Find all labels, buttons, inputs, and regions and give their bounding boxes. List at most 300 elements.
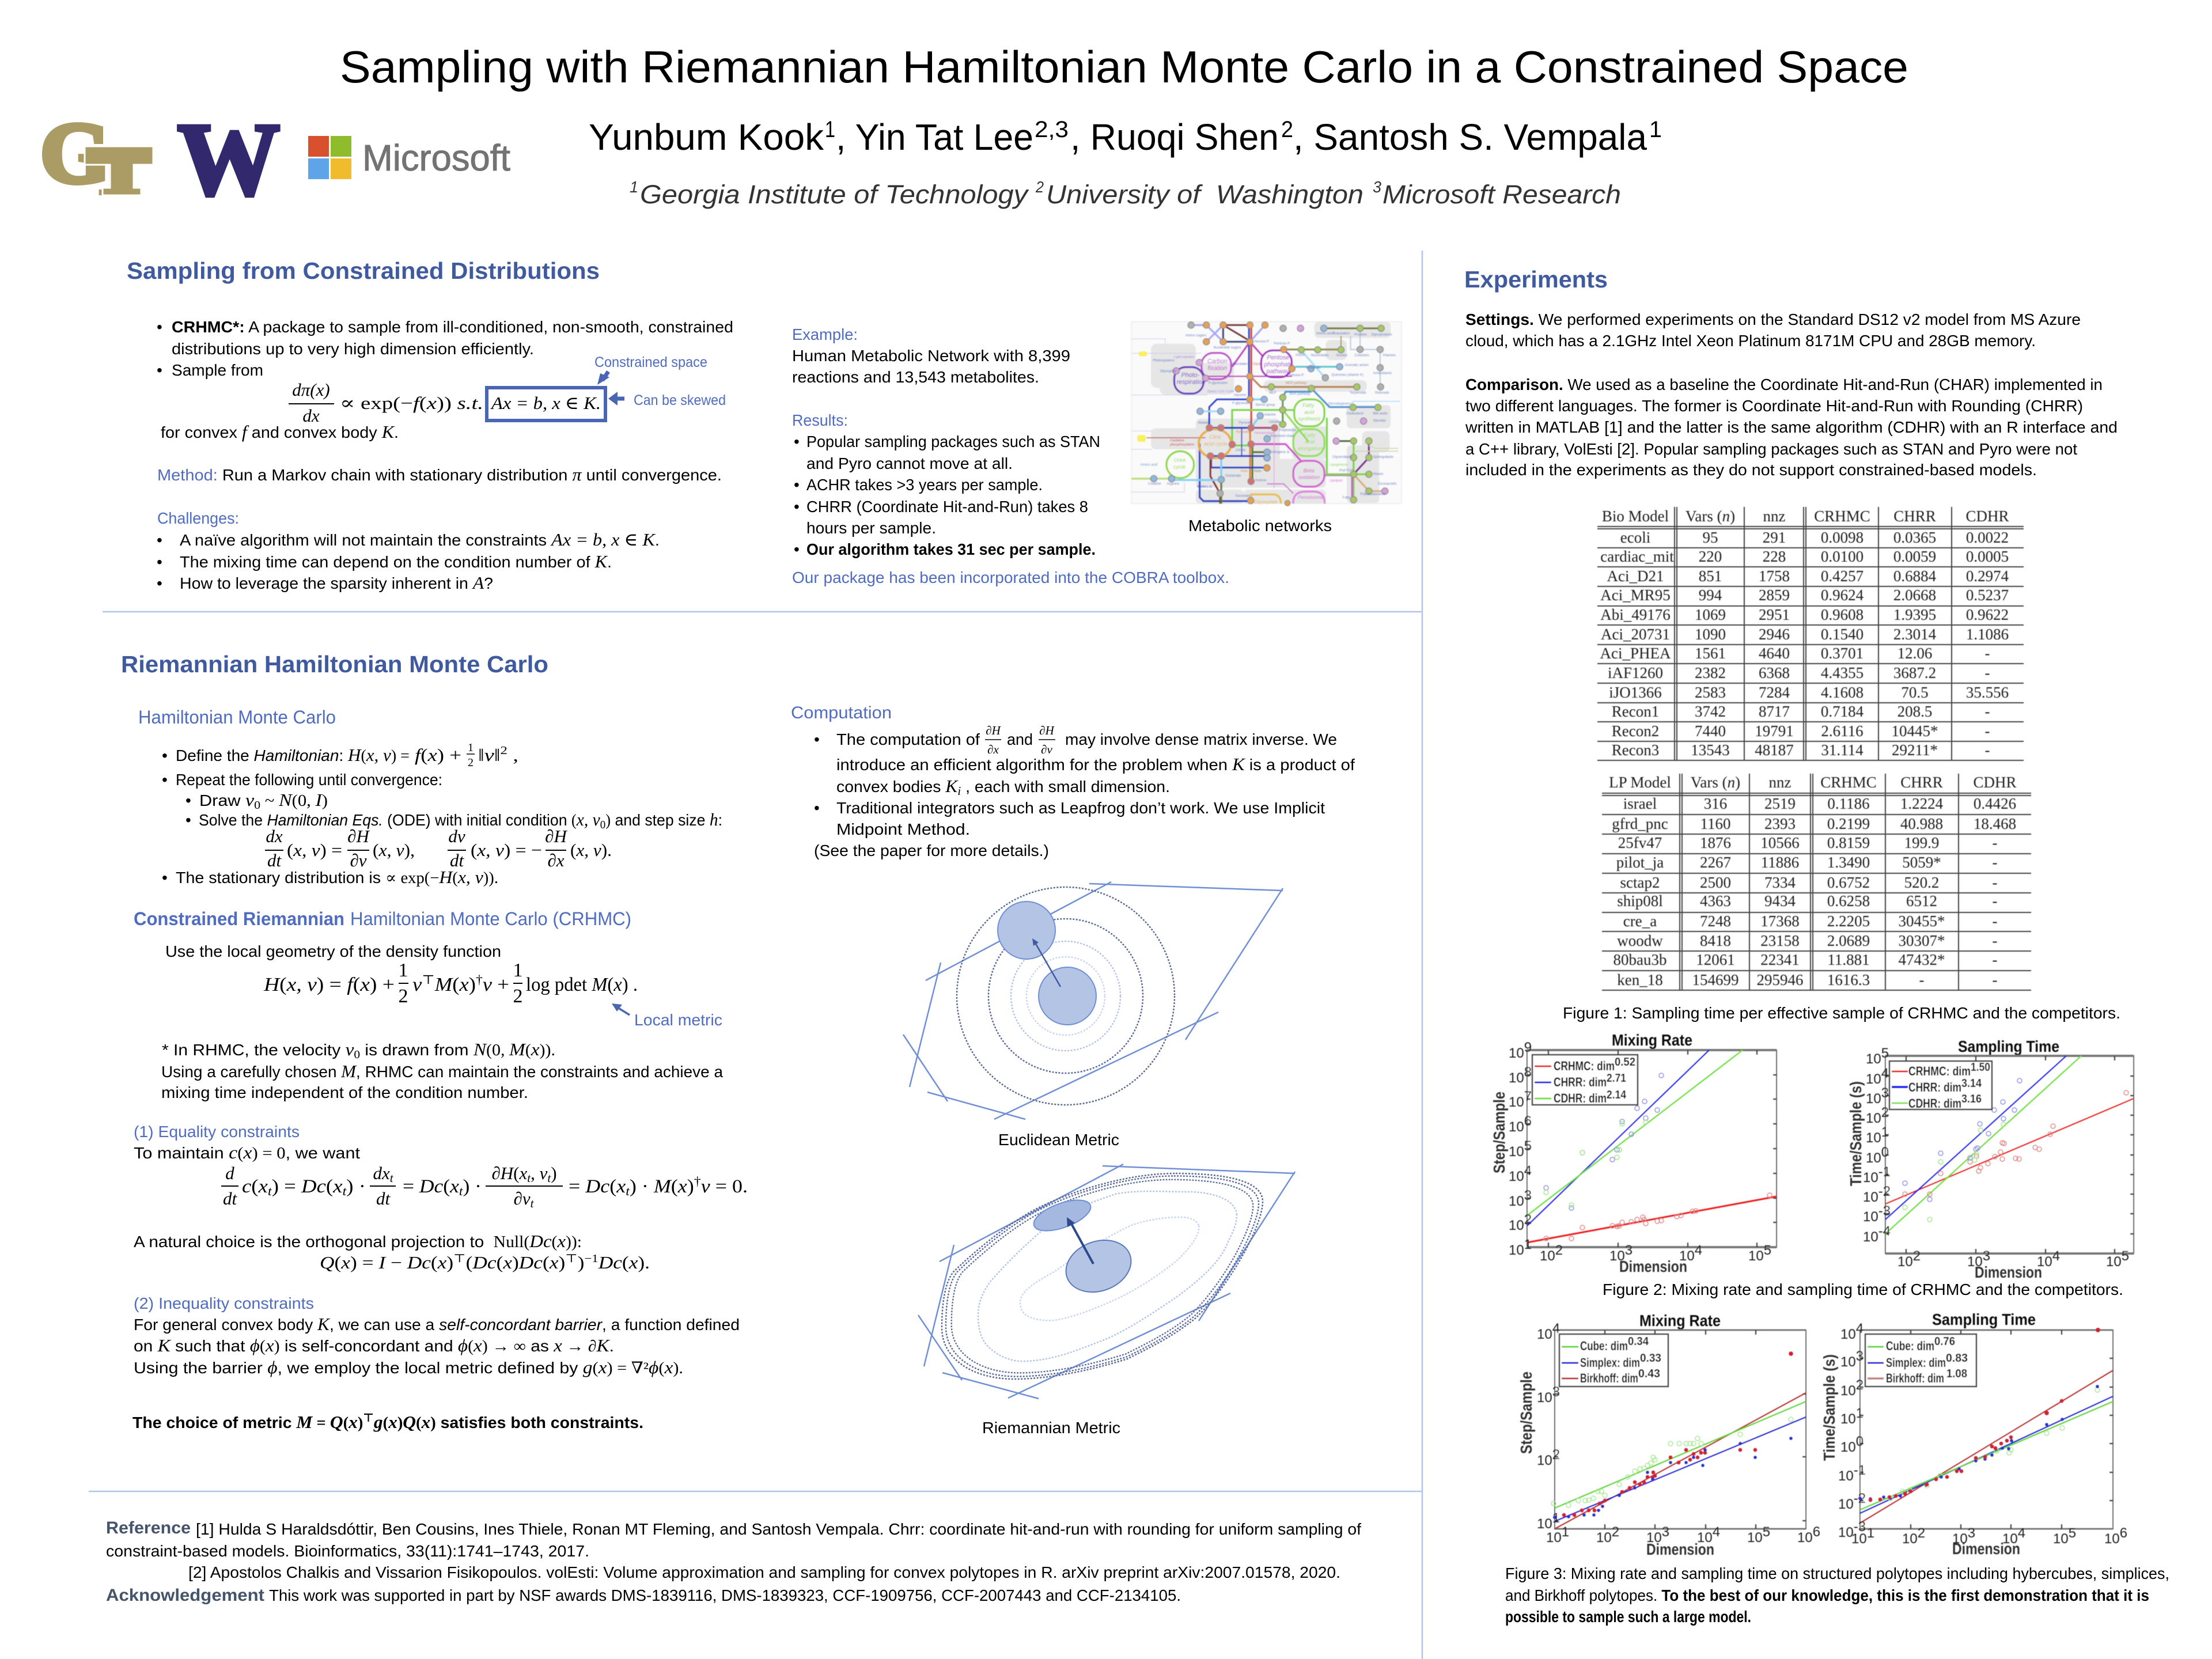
formula: riemannian hamiltonian: 2 — [399, 986, 408, 1007]
chart: figure 3 mixing rate: 0.34 — [1628, 1335, 1649, 1348]
chart: figure 2 sampling time: -4 — [1878, 1224, 1891, 1239]
table: LP models: 295946 — [1757, 971, 1803, 988]
diagram: metabolic network: Cholesterol — [1346, 412, 1363, 415]
table: bio models: 10445* — [1892, 722, 1938, 740]
formula: equality constraint derivation: ) = — [272, 1176, 301, 1197]
diagram: metabolic network: Sphingolipids — [1373, 456, 1393, 459]
chart: figure 2 mixing rate: 2 — [1524, 1212, 1532, 1228]
text block: hamiltonian definition: ‖v‖ — [478, 745, 499, 765]
diagram: metabolic network: Pyruvate — [1239, 421, 1253, 425]
formula: equality constraint derivation: ∂H(x — [491, 1163, 527, 1183]
chart: figure 3 mixing rate: 6 — [1813, 1524, 1820, 1540]
formula: target density: dπ(x) — [292, 380, 330, 400]
diagram: metabolic network: Creatine — [1148, 483, 1161, 486]
chart: figure 2 sampling time: 10 — [1897, 1254, 1913, 1270]
chart: figure 2 sampling time — [1847, 1037, 2134, 1281]
table: bio models: 291 — [1763, 529, 1786, 546]
text block: example: reactions and 13,543 metabolites. — [792, 368, 1039, 386]
chart: figure 3 sampling time: 10 — [1840, 1411, 1856, 1427]
table: bio models: 220 — [1699, 548, 1722, 565]
chart: figure 2 sampling time: -3 — [1878, 1203, 1891, 1219]
text block: RHMC note: is drawn from — [360, 1041, 474, 1059]
diagram: metabolic network: acid cycle — [1204, 441, 1228, 446]
formula: equality constraint derivation: Dc(x — [301, 1176, 342, 1197]
chart: figure 2 sampling time: 10 — [1866, 1051, 1881, 1067]
diagram: metabolic network: Polyketides — [1279, 429, 1297, 433]
chart: figure 3 mixing rate: 3 — [1662, 1524, 1669, 1540]
diagram: metabolic network: Nucleotide sugars — [1214, 346, 1241, 350]
logo: Microsoft: Microsoft — [362, 137, 510, 179]
text and formula: orthogonal projection: ( — [466, 1252, 472, 1272]
table: bio models: 2583 — [1695, 684, 1726, 701]
chart: figure 2 sampling time: 10 — [1863, 1209, 1878, 1225]
text block: results — [792, 411, 1229, 586]
diagram: metabolic network: Nucleotides — [1311, 354, 1329, 358]
table: bio models: 6368 — [1759, 664, 1790, 681]
diagram: metabolic network: acid — [1304, 409, 1315, 415]
table: bio models: 2859 — [1759, 586, 1790, 604]
chart: figure 3 sampling time: 10 — [1840, 1383, 1856, 1399]
authors: 1 — [825, 117, 835, 142]
chart: figure 2 sampling time: 10 — [1866, 1130, 1881, 1146]
diagram: metabolic network: Lipolysis — [1330, 479, 1343, 483]
chart: figure 3 sampling time: 10 — [2053, 1531, 2069, 1547]
table: LP models: 23158 — [1760, 932, 1800, 949]
authors: , Yin Tat Lee — [836, 116, 1033, 158]
chart: figure 3 sampling time: 1 — [1867, 1525, 1874, 1541]
table: LP models: 2267 — [1700, 854, 1731, 871]
diagram: metabolic network: Eicosanoids — [1378, 483, 1396, 486]
text block: results: Our algorithm takes 31 sec per sample. — [806, 540, 1096, 558]
formula: equality constraint derivation: c(x — [242, 1176, 267, 1197]
text block: computation notes: • — [814, 799, 820, 817]
chart: figure 2 mixing rate: 2.71 — [1607, 1072, 1626, 1085]
chart: figure 3 sampling time: 10 — [2104, 1531, 2120, 1547]
text block: computation notes: , each with small dimension. — [961, 778, 1170, 796]
chart: figure 3 mixing rate: 2 — [1552, 1447, 1560, 1463]
formula: hamilton's equations: dv — [448, 826, 465, 846]
text block: challenges: • — [157, 553, 162, 571]
chart: figure 2 sampling time: 10 — [1866, 1150, 1881, 1166]
text block: references: Reference — [106, 1518, 191, 1537]
chart: figure 3 mixing rate: 10 — [1546, 1530, 1562, 1546]
chart: figure 2 mixing rate: Dimension — [1619, 1257, 1687, 1275]
chart: figure 2 sampling time: 2 — [1913, 1248, 1921, 1264]
table: bio models: 1.9395 — [1893, 606, 1936, 623]
text block: inequality constraints: Using the barrier ϕ, we employ the local metric defined by g(x) = ∇²ϕ(x). — [134, 1357, 683, 1377]
text and formula: orthogonal projection: ⊤ — [565, 1252, 578, 1265]
text block: challenges: • — [157, 574, 162, 592]
diagram: metabolic network: Steroidogenesis — [1328, 403, 1353, 406]
table: bio models: 1069 — [1695, 606, 1726, 623]
diagram: metabolic network: Fermentation — [1254, 431, 1275, 435]
chart: figure 2 sampling time: 10 — [1866, 1111, 1881, 1126]
text block: hamiltonian definition: • — [185, 811, 191, 829]
text and formula: orthogonal projection: ) — [578, 1252, 584, 1272]
table: LP models: 10566 — [1760, 834, 1800, 851]
chart: figure 2 mixing rate: 7 — [1524, 1089, 1532, 1104]
table: LP models: 0.6258 — [1827, 892, 1870, 910]
table: LP models: 0.4426 — [1974, 795, 2016, 812]
chart: figure 3 mixing rate: 3 — [1552, 1384, 1560, 1400]
table: bio models: 48187 — [1755, 741, 1794, 759]
chart: figure 2 sampling time: CDHR: dim — [1908, 1096, 1961, 1111]
diagram: metabolic network: Fatty — [1304, 432, 1316, 438]
diagram: metabolic network: Lactate — [1269, 421, 1281, 424]
caption: riemannian metric: Riemannian Metric — [982, 1419, 1120, 1437]
table: bio models: - — [1985, 722, 1990, 740]
text block: computation notes: and — [1007, 730, 1033, 748]
formula: equality constraint derivation: = Dc(x — [569, 1176, 625, 1197]
subheading: CRHMC — [134, 908, 631, 929]
diagram: metabolic network: feeders to — [1197, 486, 1213, 489]
text block: CRHMC description: CRHMC*: A package to sample from ill-conditioned, non-smooth, constrained — [172, 318, 733, 336]
diagram: metabolic network: Beta — [1304, 468, 1315, 474]
formula: hamilton's equations — [265, 826, 612, 870]
text block: settings: Settings. We performed experiments on the Standard DS12 v2 model from MS Azure — [1465, 310, 2081, 328]
subheading: computation: Computation — [791, 703, 892, 722]
panel: sampling from constrained distributions — [127, 257, 1402, 593]
chart: figure 2 sampling time: 10 — [1863, 1229, 1878, 1245]
diagram: metabolic network: MVA pathway — [1289, 392, 1311, 396]
text block: hamiltonian definition: f(x) + — [415, 745, 461, 765]
chart: figure 3 mixing rate: Birkhoff: dim — [1580, 1371, 1638, 1385]
chart: figure 2 sampling time: Time/Sample (s) — [1847, 1081, 1865, 1186]
text block: hamiltonian definition: 2 — [501, 744, 507, 757]
text block: inequality constraints: on K such that ϕ(x) is self-concordant and ϕ(x) → ∞ as x → ∂K. — [134, 1335, 614, 1355]
chart: figure 2 mixing rate: 10 — [1509, 1194, 1524, 1209]
text block: references: constraint-based models. Bioinformatics, 33(11):1741–1743, 2017. — [106, 1542, 589, 1560]
callout: constrained space: Constrained space — [594, 354, 707, 370]
chart: figure 3 sampling time: 10 — [2002, 1531, 2018, 1547]
table: LP models: 25fv47 — [1618, 834, 1662, 851]
table: LP models: 11886 — [1761, 854, 1799, 871]
chart: figure 2 sampling time: CRHMC: dim — [1908, 1064, 1971, 1078]
formula: target density — [289, 380, 605, 426]
text: convex note: for convex f and convex body K. — [161, 422, 399, 442]
chart: figure 3 sampling time: 10 — [1840, 1354, 1856, 1370]
formula: equality constraint derivation: t — [268, 1184, 272, 1198]
chart: figure 3 mixing rate: 4 — [1552, 1321, 1560, 1336]
table: LP models: CRHMC — [1820, 774, 1877, 791]
logo: Georgia Tech — [40, 105, 153, 209]
table: bio models: 0.0005 — [1966, 548, 2009, 565]
diagram: metabolic network: Serine group — [1255, 403, 1275, 407]
title: Sampling with Riemannian Hamiltonian Monte Carlo in a Constrained Space — [340, 41, 1908, 92]
table: bio models: Bio Model — [1602, 507, 1669, 525]
diagram: metabolic network: Ketone — [1255, 479, 1267, 482]
chart: figure 2 sampling time: 2 — [1881, 1105, 1889, 1120]
formula: hamilton's equations: ∂x — [547, 850, 565, 870]
formula: equality constraint derivation: ) — [551, 1163, 557, 1183]
text block: hamiltonian definition: ~ — [260, 792, 279, 810]
chart: figure 2 sampling time: Dimension — [1975, 1263, 2042, 1281]
panel: experiments — [1464, 266, 2169, 1626]
chart: figure 2 sampling time: 3 — [1881, 1085, 1889, 1101]
table: bio models: - — [1985, 703, 1990, 720]
diagram: metabolic network: Malate — [1198, 421, 1209, 425]
text block: results: • — [794, 498, 800, 516]
chart: figure 2 mixing rate: 9 — [1524, 1040, 1532, 1055]
text block: CRHMC description: distributions up to very high dimension efficiently. — [172, 340, 534, 358]
chart: figure 3 sampling time: 3 — [1968, 1525, 1975, 1541]
diagram: metabolic network: Glutamate — [1225, 474, 1241, 478]
text and formula: orthogonal projection: Dc — [598, 1252, 622, 1272]
table: bio models: Recon2 — [1612, 722, 1659, 740]
formula: equality constraint derivation: M(x) — [654, 1176, 694, 1197]
chart: figure 3 sampling time — [1820, 1310, 2127, 1558]
table: LP models: - — [1992, 971, 1998, 988]
chart: figure 3 sampling time: Sampling Time — [1932, 1310, 2036, 1328]
table: LP models: 2519 — [1764, 795, 1796, 812]
diagram: metabolic network: Carbon — [1207, 358, 1228, 365]
text block: references — [106, 1518, 1361, 1581]
diagram: riemannian metric — [918, 1164, 1295, 1399]
table: LP models: 9434 — [1764, 892, 1796, 910]
formula: equality constraint derivation: v — [540, 1163, 548, 1183]
text block: equality constraints — [134, 1123, 360, 1162]
chart: figure 2 mixing rate: CDHR: dim — [1554, 1091, 1607, 1105]
diagram: metabolic network: Glyco- — [1253, 362, 1263, 366]
text block: CRHMC description: Sample from — [172, 361, 263, 379]
chart: figure 2 mixing rate: 10 — [1609, 1248, 1625, 1264]
affiliations: University of Washington — [1046, 180, 1363, 209]
diagram: metabolic network: Pentose-P — [1274, 342, 1290, 346]
diagram: metabolic network: Urea — [1174, 457, 1185, 463]
formula: equality constraint derivation: † — [694, 1174, 701, 1188]
text block: computation notes: The computation of — [836, 730, 980, 748]
text block: computation notes: ∂H — [986, 724, 1002, 737]
table: bio models: 4.1608 — [1821, 684, 1863, 701]
table: LP models: ship08l — [1617, 892, 1663, 910]
chart: figure 3 sampling time: Time/Sample (s) — [1820, 1354, 1838, 1461]
table: bio models: 2382 — [1695, 664, 1726, 681]
table: LP models: ken_18 — [1617, 971, 1663, 988]
table: bio models: 2.0668 — [1893, 586, 1936, 604]
diagram: metabolic network: Glycerol — [1234, 394, 1246, 397]
chart: figure 2 mixing rate: 10 — [1509, 1070, 1524, 1086]
caption: figure 3 — [1505, 1565, 2169, 1626]
text block: equality constraints: To maintain c(x) = 0, we want — [134, 1142, 360, 1162]
diagram: metabolic network: MEP — [1269, 392, 1277, 395]
formula: hamilton's equations: (x, v) = − — [471, 840, 542, 860]
table: bio models: 29211* — [1892, 741, 1938, 759]
table: bio models: 2.3014 — [1893, 626, 1937, 643]
chart: figure 2 mixing rate: 10 — [1509, 1046, 1524, 1061]
chart: figure 3 sampling time: 10 — [1840, 1327, 1856, 1342]
diagram: metabolic network: Aromatic amino — [1345, 364, 1369, 368]
chart: figure 3 sampling time: 0.76 — [1934, 1335, 1955, 1348]
panel: riemannian hamiltonian monte carlo — [121, 651, 748, 1432]
diagram: metabolic network: Fatty — [1302, 403, 1315, 408]
diagram: metabolic network: Retinoids — [1375, 392, 1389, 395]
diagram: metabolic network: P-glycerates — [1209, 382, 1228, 385]
text block: hamiltonian definition: Define the Hamiltonian: H(x, v) = — [176, 745, 410, 765]
text block: challenges: How to leverage the sparsity inherent in A? — [180, 573, 493, 593]
text and formula: orthogonal projection: (x). — [622, 1252, 648, 1272]
chart: figure 2 sampling time: 1 — [1881, 1124, 1889, 1140]
diagram: metabolic network: Amino acids — [1316, 332, 1335, 336]
table: bio models: 0.1540 — [1821, 626, 1863, 643]
table: bio models: 1090 — [1695, 626, 1726, 643]
chart: figure 2 mixing rate: 4 — [1695, 1243, 1702, 1258]
text block: computation notes: ∂H — [1039, 724, 1055, 737]
diagram: metabolic network: Ketogenic & — [1271, 451, 1289, 454]
table: bio models: iAF1260 — [1608, 664, 1663, 681]
affiliations: Georgia Institute of Technology — [640, 180, 1029, 209]
diagram: metabolic network: fixation — [1208, 365, 1227, 372]
chart: figure 3 sampling time: 0 — [1856, 1434, 1863, 1449]
diagram: metabolic network: Lipogenesis — [1330, 464, 1348, 467]
text block: computation notes: ∂v — [1041, 743, 1053, 756]
table: bio models: 0.0365 — [1893, 529, 1936, 546]
caption: euclidean metric: Euclidean Metric — [998, 1131, 1119, 1149]
diagram: metabolic network: Cofactors — [1354, 354, 1369, 358]
table: bio models: - — [1985, 664, 1990, 681]
chart: figure 2 sampling time: Sampling Time — [1958, 1037, 2059, 1055]
caption: figure 2: Figure 2: Mixing rate and sampling time of CRHMC and the competitors. — [1603, 1281, 2123, 1298]
chart: figure 2 sampling time: -1 — [1878, 1164, 1891, 1180]
text block: results: ACHR takes >3 years per sample. — [806, 476, 1043, 494]
table: bio models: CDHR — [1965, 507, 2009, 525]
formula: equality constraint derivation — [221, 1163, 748, 1210]
chart: figure 2 sampling time: 3.16 — [1961, 1093, 1982, 1105]
diagram: metabolic network: Glyoxylate — [1254, 499, 1278, 505]
chart: figure 3 sampling time: 10 — [1838, 1468, 1854, 1484]
diagram: metabolic network: Amino sugars — [1185, 334, 1206, 338]
formula: hamilton's equations: dt — [267, 850, 282, 870]
text and formula: orthogonal projection: Dc(x)Dc(x) — [472, 1252, 565, 1272]
chart: figure 3 sampling time: -1 — [1854, 1463, 1866, 1478]
chart: figure 3 mixing rate: 10 — [1537, 1390, 1552, 1406]
table: LP models: 17368 — [1760, 912, 1800, 930]
chart: figure 2 sampling time: 3.14 — [1961, 1077, 1982, 1090]
text block: acknowledgement: Acknowledgement — [106, 1586, 264, 1605]
table: LP models: 2393 — [1764, 815, 1796, 832]
table: bio models: ecoli — [1620, 529, 1650, 546]
chart: figure 3 mixing rate: Simplex: dim — [1580, 1355, 1640, 1370]
text block: computation notes: Traditional integrators such as Leapfrog don’t work. We use Implicit — [836, 799, 1325, 817]
table: bio models: 7440 — [1695, 722, 1726, 740]
formula: equality constraint derivation: v — [701, 1176, 710, 1197]
diagram: metabolic network: phosphate — [1263, 361, 1293, 368]
chart: figure 3 sampling time: -3 — [1854, 1519, 1866, 1535]
subheading: hamiltonian monte carlo: Hamiltonian Monte Carlo — [138, 707, 336, 728]
diagram: metabolic network: oxidation — [1298, 475, 1320, 480]
chart: figure 3 sampling time: 0.83 — [1946, 1352, 1968, 1365]
table: bio models: 0.4257 — [1821, 567, 1863, 585]
heading: sampling from constrained distributions: Sampling from Constrained Distributions — [127, 257, 600, 284]
table: LP models: - — [1992, 892, 1998, 910]
text block: inequality constraints: For general convex body K, we can use a self-concordant barrier, a function defined — [134, 1314, 740, 1334]
table: bio models: 0.0022 — [1966, 529, 2009, 546]
formula: riemannian hamiltonian: H(x, v) = f(x) + — [263, 974, 395, 995]
diagram: metabolic network: Photo- — [1181, 372, 1199, 379]
affiliations: 2 — [1035, 178, 1044, 196]
text block: challenges: Challenges: — [157, 509, 239, 527]
chart: figure 3 sampling time: Dimension — [1952, 1540, 2020, 1558]
table: bio models: 12.06 — [1897, 645, 1932, 662]
table: LP models: 7248 — [1700, 912, 1731, 930]
text block: hamiltonian definition: • — [162, 771, 168, 789]
formula: equality constraint derivation: dx — [373, 1163, 390, 1183]
chart: figure 3 mixing rate: 4 — [1713, 1524, 1720, 1540]
chart: figure 3 mixing rate: 2 — [1612, 1524, 1619, 1540]
chart: figure 2 mixing rate: 10 — [1509, 1094, 1524, 1110]
table: LP models: 18.468 — [1974, 815, 2016, 832]
chart: figure 2 mixing rate: CHRR: dim — [1554, 1075, 1607, 1089]
text block: hamiltonian definition: • — [162, 747, 168, 764]
table: LP models: gfrd_pnc — [1612, 815, 1668, 832]
table: LP models: 2.2205 — [1827, 912, 1870, 930]
affiliations: 3 — [1373, 178, 1381, 196]
formula: hamilton's equations: dt — [450, 850, 464, 870]
table: bio models: nnz — [1763, 507, 1786, 525]
text block: challenges: • — [157, 531, 162, 549]
affiliations — [630, 178, 1621, 209]
text block: RHMC note: 0 — [354, 1048, 360, 1061]
authors: , Ruoqi Shen — [1070, 116, 1279, 158]
authors — [589, 116, 1662, 158]
table: LP models: - — [1992, 932, 1998, 949]
chart: figure 3 mixing rate: 0.33 — [1640, 1352, 1661, 1365]
chart: figure 2 sampling time: 10 — [1863, 1170, 1878, 1185]
chart: figure 3 mixing rate: 1 — [1562, 1524, 1569, 1540]
formula: riemannian hamiltonian: v — [412, 974, 422, 995]
diagram: metabolic network: P-glycerates — [1232, 402, 1251, 405]
diagram: metabolic network: Terpenoids — [1350, 392, 1366, 395]
diagram: metabolic network: Photosystems — [1153, 359, 1175, 362]
table: bio models: 1561 — [1695, 645, 1726, 662]
table: bio models: Aci_20731 — [1601, 626, 1670, 643]
chart: figure 2 mixing rate: 10 — [1509, 1169, 1524, 1184]
formula: riemannian hamiltonian: v — [483, 974, 493, 995]
table: bio models: 0.3701 — [1821, 645, 1863, 662]
heading: experiments: Experiments — [1464, 266, 1608, 293]
table: bio models: 0.9608 — [1821, 606, 1863, 623]
chart: figure 2 sampling time: 10 — [1866, 1071, 1881, 1087]
text block: hamiltonian definition: • — [185, 791, 191, 809]
text: choice of metric: (x)Q(x) satisfies both constraints. — [383, 1412, 640, 1432]
text and formula: orthogonal projection: Q(x) = I − Dc(x) — [320, 1252, 453, 1272]
divider lines — [89, 251, 1422, 1659]
text block: references: [2] Apostolos Chalkis and Vissarion Fisikopoulos. volEsti: Volume approximation and sampling for convex polytopes in R. arXiv preprint arXiv:2007.01578, 2020. — [188, 1563, 1340, 1581]
callout: constrained space — [594, 354, 707, 385]
chart: figure 3 mixing rate: Dimension — [1646, 1540, 1714, 1558]
formula: riemannian hamiltonian: + — [497, 974, 508, 995]
table: LP models: 12061 — [1696, 951, 1735, 968]
table: bio models: 0.0098 — [1821, 529, 1863, 546]
logo: Georgia Tech: G — [40, 105, 111, 201]
text block: computation notes: convex bodies K — [836, 776, 957, 796]
table: bio models: Aci_MR95 — [1600, 586, 1671, 604]
text block: settings — [1465, 310, 2081, 350]
logo: Microsoft — [308, 136, 510, 179]
table: bio models: 0.7184 — [1821, 703, 1864, 720]
formula: riemannian hamiltonian — [263, 960, 638, 1007]
chart: figure 3 mixing rate: 10 — [1747, 1530, 1763, 1546]
diagram: metabolic network: Vitamins — [1382, 354, 1396, 358]
text block: computation notes: may involve dense matrix inverse. We — [1065, 730, 1337, 748]
subheading: CRHMC: Constrained Riemannian — [134, 908, 344, 929]
table: bio models: 851 — [1699, 567, 1722, 585]
table: LP models: woodw — [1617, 932, 1663, 949]
chart: figure 3 sampling time: 3 — [1856, 1349, 1863, 1364]
table: LP models: CDHR — [1973, 774, 2017, 791]
table: LP models: 4363 — [1700, 892, 1731, 910]
table: LP models: 11.881 — [1827, 951, 1870, 968]
caption: figure 1: Figure 1: Sampling time per effective sample of CRHMC and the competitors. — [1563, 1004, 2120, 1022]
